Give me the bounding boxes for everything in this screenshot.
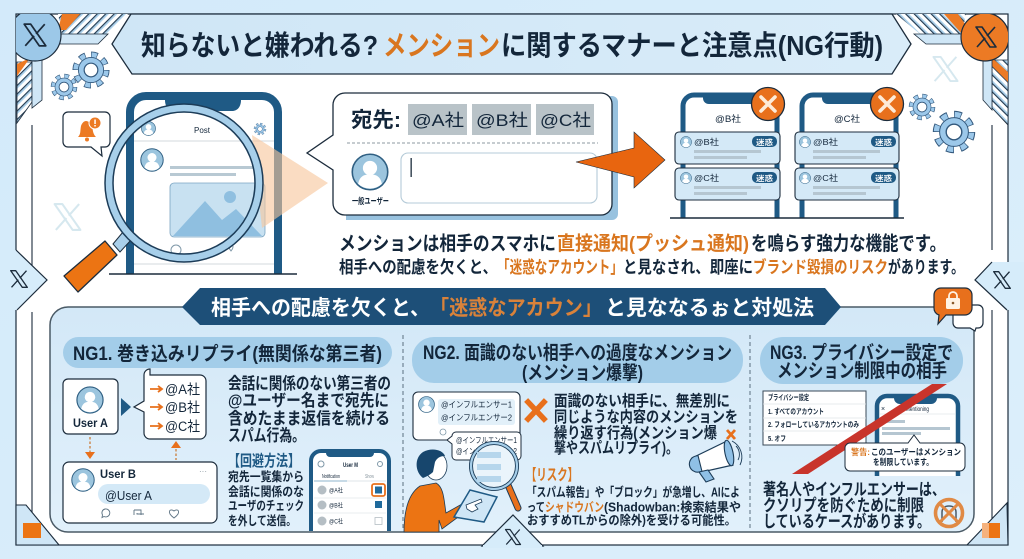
corner top-right: hatch and X badge (896, 13, 1009, 125)
title banner: 知らないと嫌われる? (141, 30, 378, 61)
description (763, 480, 945, 531)
recipient phones (670, 88, 904, 218)
small phone: notification settings: User M (343, 463, 358, 469)
description (554, 391, 738, 457)
title banner: メンション (383, 30, 500, 61)
phone: @B社: 迷惑 (756, 137, 774, 147)
User B card: ··· (199, 467, 207, 476)
risk text (527, 484, 741, 528)
heading: NG3. プライバシー設定で (770, 342, 953, 364)
warning phone: Mentioning (906, 407, 929, 413)
phone: @B社: @B社 (715, 113, 741, 124)
main phone (109, 96, 297, 274)
mention list bubble: @B社 (165, 400, 200, 415)
corner bottom-left (16, 505, 59, 545)
privacy settings list (763, 391, 866, 445)
section heading band: 相手への配慮を欠くと、 (211, 296, 430, 320)
mention list bubble (121, 369, 206, 439)
speech bubble: compose mention (307, 93, 618, 220)
privacy settings list: 2. フォローしているアカウントのみ (768, 420, 859, 429)
right diamond with X (975, 262, 1024, 310)
person with tablet (404, 449, 497, 532)
phone: @C社: @B社 (813, 137, 839, 147)
description text: 相手への配慮を欠くと、 (339, 257, 497, 277)
bottom centre tab with X (482, 515, 543, 548)
description: 会話に関係のない第三者の (228, 373, 391, 393)
heading: NG2. 面識のない相手への過度なメンション (423, 341, 732, 364)
mention bubble 1: @インフルエンサー2 (441, 412, 512, 422)
phone: @C社: @C社 (834, 113, 860, 124)
section heading band: 「迷惑なアカウン」 (430, 297, 602, 320)
small phone: notification settings: @A社 (329, 486, 343, 494)
icon: ghost X right (933, 57, 958, 81)
description text: があります。 (888, 257, 964, 277)
mention bubble 2: @インフルエンサー1 (456, 436, 517, 445)
description: 繰り返す行為(メンション爆 (554, 424, 717, 442)
small phone: notification settings: @B社 (329, 502, 343, 510)
avoidance text: を外して送信。 (228, 513, 296, 528)
avoidance text (228, 469, 304, 528)
warning bubble: このユーザーはメンション (871, 447, 961, 457)
mention list bubble: @C社 (165, 419, 200, 434)
risk text: おすすめTLからの除外)を受ける可能性。 (527, 512, 736, 528)
avoidance heading: 【回避方法】 (228, 451, 300, 470)
icon: megaphone (689, 439, 742, 482)
description text: メンションは相手のスマホに (339, 233, 556, 255)
left diamond with X (0, 250, 47, 310)
recipients row: @C社 (540, 111, 591, 130)
magnifying glass (64, 108, 259, 292)
risk heading: 【リスク】 (526, 466, 578, 484)
warning bubble: を制限しています。 (873, 457, 933, 467)
recipients row: @A社 (412, 111, 464, 130)
recipients row (351, 104, 594, 135)
privacy settings list: プライバシー設定 (768, 393, 809, 402)
phone: @B社: 迷惑 (756, 173, 774, 183)
small phone: notification settings: Notification (322, 474, 340, 480)
icon: orange X (528, 402, 544, 419)
heading (63, 337, 392, 368)
orange triangle spotlight (252, 135, 328, 228)
User B card: @User A (105, 488, 152, 503)
icon: notification bell bubble (63, 112, 110, 156)
description: しているケースがあります。 (763, 511, 930, 531)
description text: 直接通知(プッシュ通知) (557, 233, 749, 255)
red strike (792, 384, 947, 474)
small phone: notification settings: @C社 (329, 518, 343, 526)
panel: NG2 (404, 337, 743, 532)
magnifier over list (471, 443, 518, 508)
dashed arrows (85, 437, 181, 460)
heading (760, 337, 963, 384)
corner bottom-right (967, 503, 1008, 545)
section heading band: と見ななるぉと対処法 (605, 297, 814, 320)
description (228, 373, 391, 445)
panel: NG section (50, 307, 974, 532)
main phone: Post (194, 126, 211, 135)
User B card (63, 462, 217, 523)
icon: X badge 1 (752, 88, 784, 120)
description text (339, 233, 964, 277)
icon: prohibited (936, 500, 962, 526)
panel: NG3 (760, 337, 965, 531)
recipients row: 宛先: (351, 109, 401, 132)
avoidance text: 宛先一覧集から (228, 469, 304, 484)
icon: ghost X left (55, 204, 80, 230)
privacy settings list: 5. オフ (768, 434, 786, 443)
warning bubble (845, 435, 965, 471)
description text: と見なされ、即座に (623, 258, 753, 277)
phone: @B社: @C社 (694, 173, 720, 183)
description: スパム行為。 (228, 426, 305, 445)
panel: NG1 (63, 337, 392, 531)
heading: (メンション爆撃) (522, 362, 643, 384)
mention bubble 1: @インフルエンサー1 (441, 400, 512, 410)
speech bubble: compose mention: 一般ユーザー (352, 196, 389, 206)
icon: gears top-left (53, 55, 106, 98)
phone: @C社 (795, 95, 899, 218)
User B card: User B (100, 467, 136, 481)
User A box (63, 379, 118, 434)
risk text: (Shadowban:検索結果や (604, 500, 741, 514)
mention bubble 2: @インフルエンサー2 (456, 447, 517, 456)
heading (412, 337, 743, 384)
icon: lock bubble (934, 288, 983, 331)
title banner (112, 14, 911, 74)
heading: メンション制限中の相手 (777, 360, 947, 382)
phone: @B社 (675, 95, 780, 218)
description: 撃やスパムリプライ)。 (554, 439, 678, 457)
privacy settings list: 1. すべてのアカウント (768, 407, 824, 416)
description: 著名人やインフルエンサーは、 (763, 480, 945, 499)
phone: @C社: 迷惑 (875, 137, 893, 147)
mention bubble 2 (447, 432, 521, 460)
phone: @B社: @B社 (694, 137, 720, 147)
User A box: User A (73, 418, 108, 430)
description text: ブランド毀損のリスク (753, 257, 888, 277)
risk text: シャドウバン (545, 500, 604, 514)
icon: X badge 2 (870, 88, 904, 120)
description: 同じような内容のメンションを (554, 408, 738, 426)
warning bubble: 警告: (851, 447, 870, 457)
heading: NG1. 巻き込みリプライ(無関係な第三者) (73, 343, 382, 365)
description: 含めたまま返信を続ける (228, 409, 390, 428)
warning phone: × (881, 406, 885, 413)
section heading band (182, 288, 841, 325)
description text: を鳴らす強力な機能です。 (751, 233, 946, 255)
icon: small orange X (727, 430, 735, 439)
phone: @C社: @C社 (813, 173, 839, 183)
mention bubble 1 (413, 392, 520, 440)
description: 面識のない相手に、無差別に (554, 391, 730, 410)
icon: gears right (911, 96, 971, 149)
small phone: notification settings (311, 451, 389, 531)
risk text: 「スパム報告」や「ブロック」が急増し、AIによ (527, 484, 740, 500)
recipients row: @B社 (476, 111, 528, 130)
arrow to recipients (576, 132, 665, 188)
description text: 「迷惑なアカウント」 (497, 258, 623, 277)
description: クソリプを防ぐために制限 (763, 496, 924, 515)
avoidance text: ユーザのチェック (228, 499, 304, 513)
panel dividers (403, 335, 750, 530)
title banner: に関するマナーと注意点(NG行動) (501, 30, 883, 61)
description: @ユーザー名まで宛先に (228, 391, 389, 410)
phone: @C社: 迷惑 (875, 173, 893, 183)
corner top-left: hatch and X badge (9, 9, 128, 123)
mention list bubble: @A社 (165, 382, 200, 397)
avoidance text: 会話に関係のな (228, 484, 304, 499)
risk text: って (527, 500, 545, 514)
small phone: notification settings: Show (365, 474, 374, 480)
warning phone (877, 396, 958, 476)
